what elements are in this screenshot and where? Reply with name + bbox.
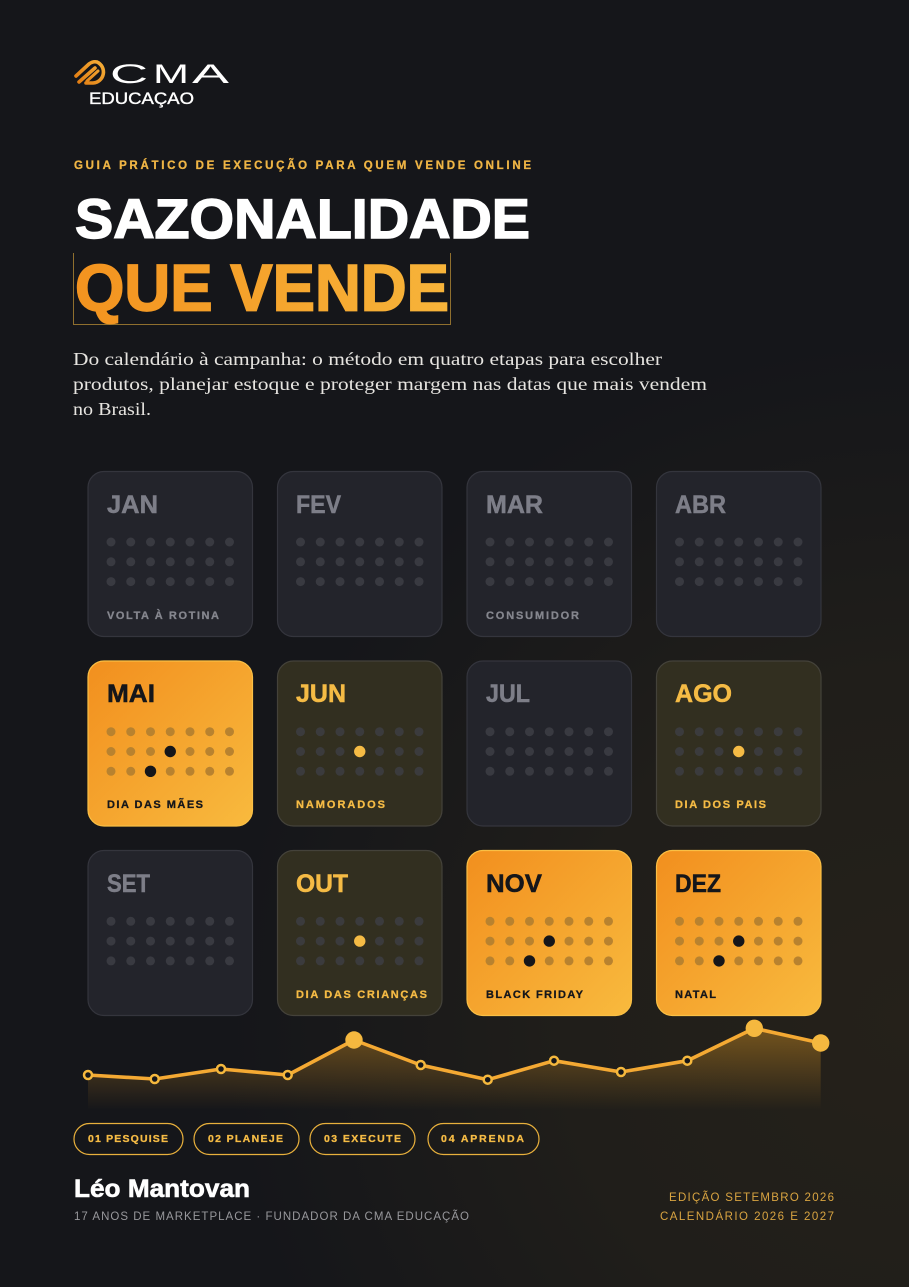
logo wordmark: C (110, 59, 148, 89)
card: MAR (467, 472, 632, 636)
author name: Léo Mantovan (74, 1175, 250, 1203)
card: NOV: BLACK FRIDAY (486, 989, 584, 1001)
edition info: EDIÇÃO SETEMBRO 2026 (669, 1191, 834, 1204)
card: SET: SET (107, 870, 150, 898)
card: OUT: OUT (296, 870, 348, 898)
card: JUN: JUN (296, 680, 346, 708)
title: QUE VENDE: QUE VENDE (75, 250, 449, 324)
intro paragraph: Do calendário à campanha: o método em quatro etapas para escolher (73, 349, 662, 369)
card: JUL (467, 661, 632, 826)
card: MAI: DIA DAS MÃES (107, 798, 203, 811)
pill: 02 Planeje (194, 1124, 299, 1154)
card: DEZ: NATAL (675, 989, 716, 1001)
line chart: seasonal demand (84, 1020, 829, 1110)
card: JUN: NAMORADOS (296, 799, 385, 811)
card: AGO: DIA DOS PAIS (675, 799, 766, 811)
title: SAZONALIDADE: SAZONALIDADE (75, 187, 530, 250)
card: DEZ (656, 850, 821, 1016)
card: JUL: JUL (486, 680, 530, 708)
logo wordmark: A (192, 59, 229, 89)
edition info: CALENDÁRIO 2026 E 2027 (660, 1210, 834, 1223)
eyebrow: GUIA PRÁTICO DE EXECUÇÃO PARA QUEM VENDE ONLINE (74, 159, 531, 172)
logo wordmark (110, 59, 229, 89)
card: MAR: CONSUMIDOR (486, 610, 579, 622)
pill: 01 Pesquise (74, 1124, 183, 1154)
intro paragraph: produtos, planejar estoque e proteger margem nas datas que mais vendem (73, 374, 707, 394)
pill: 02 Planeje: 02 PLANEJE (208, 1133, 283, 1145)
pill: 04 Aprenda (428, 1124, 539, 1154)
pill: 03 Execute: 03 EXECUTE (324, 1133, 401, 1145)
card: ABR (656, 472, 821, 636)
logo: CMA Educação (76, 59, 229, 108)
card: AGO (656, 661, 821, 826)
card: MAI (88, 661, 252, 826)
card: JAN: VOLTA À ROTINA (107, 609, 219, 622)
pill: 04 Aprenda: 04 APRENDA (441, 1133, 524, 1145)
card: DEZ: DEZ (675, 870, 721, 898)
card: FEV (278, 472, 442, 636)
card: OUT (278, 850, 442, 1016)
intro paragraph: no Brasil. (73, 399, 151, 419)
card: ABR: ABR (675, 491, 726, 519)
edition info (660, 1191, 834, 1223)
card: JUN (278, 661, 442, 826)
author credentials: 17 ANOS DE MARKETPLACE · FUNDADOR DA CMA EDUCAÇÃO (74, 1210, 469, 1223)
card: MAR: MAR (486, 491, 543, 519)
pill: 01 Pesquise: 01 PESQUISE (88, 1133, 168, 1145)
icon: logo swirl (76, 62, 103, 83)
card: NOV: NOV (486, 870, 542, 898)
card: SET (88, 850, 252, 1016)
card: JAN (88, 472, 252, 636)
card: MAI: MAI (107, 680, 155, 708)
intro paragraph (73, 349, 707, 419)
card: AGO: AGO (675, 680, 732, 708)
logo subtitle: EDUCAÇAO (89, 90, 194, 108)
card: NOV (467, 850, 632, 1016)
pill: 03 Execute (310, 1124, 415, 1154)
card: FEV: FEV (296, 491, 341, 519)
logo wordmark: M (153, 59, 189, 89)
card: OUT: DIA DAS CRIANÇAS (296, 989, 427, 1001)
card: JAN: JAN (107, 491, 158, 519)
